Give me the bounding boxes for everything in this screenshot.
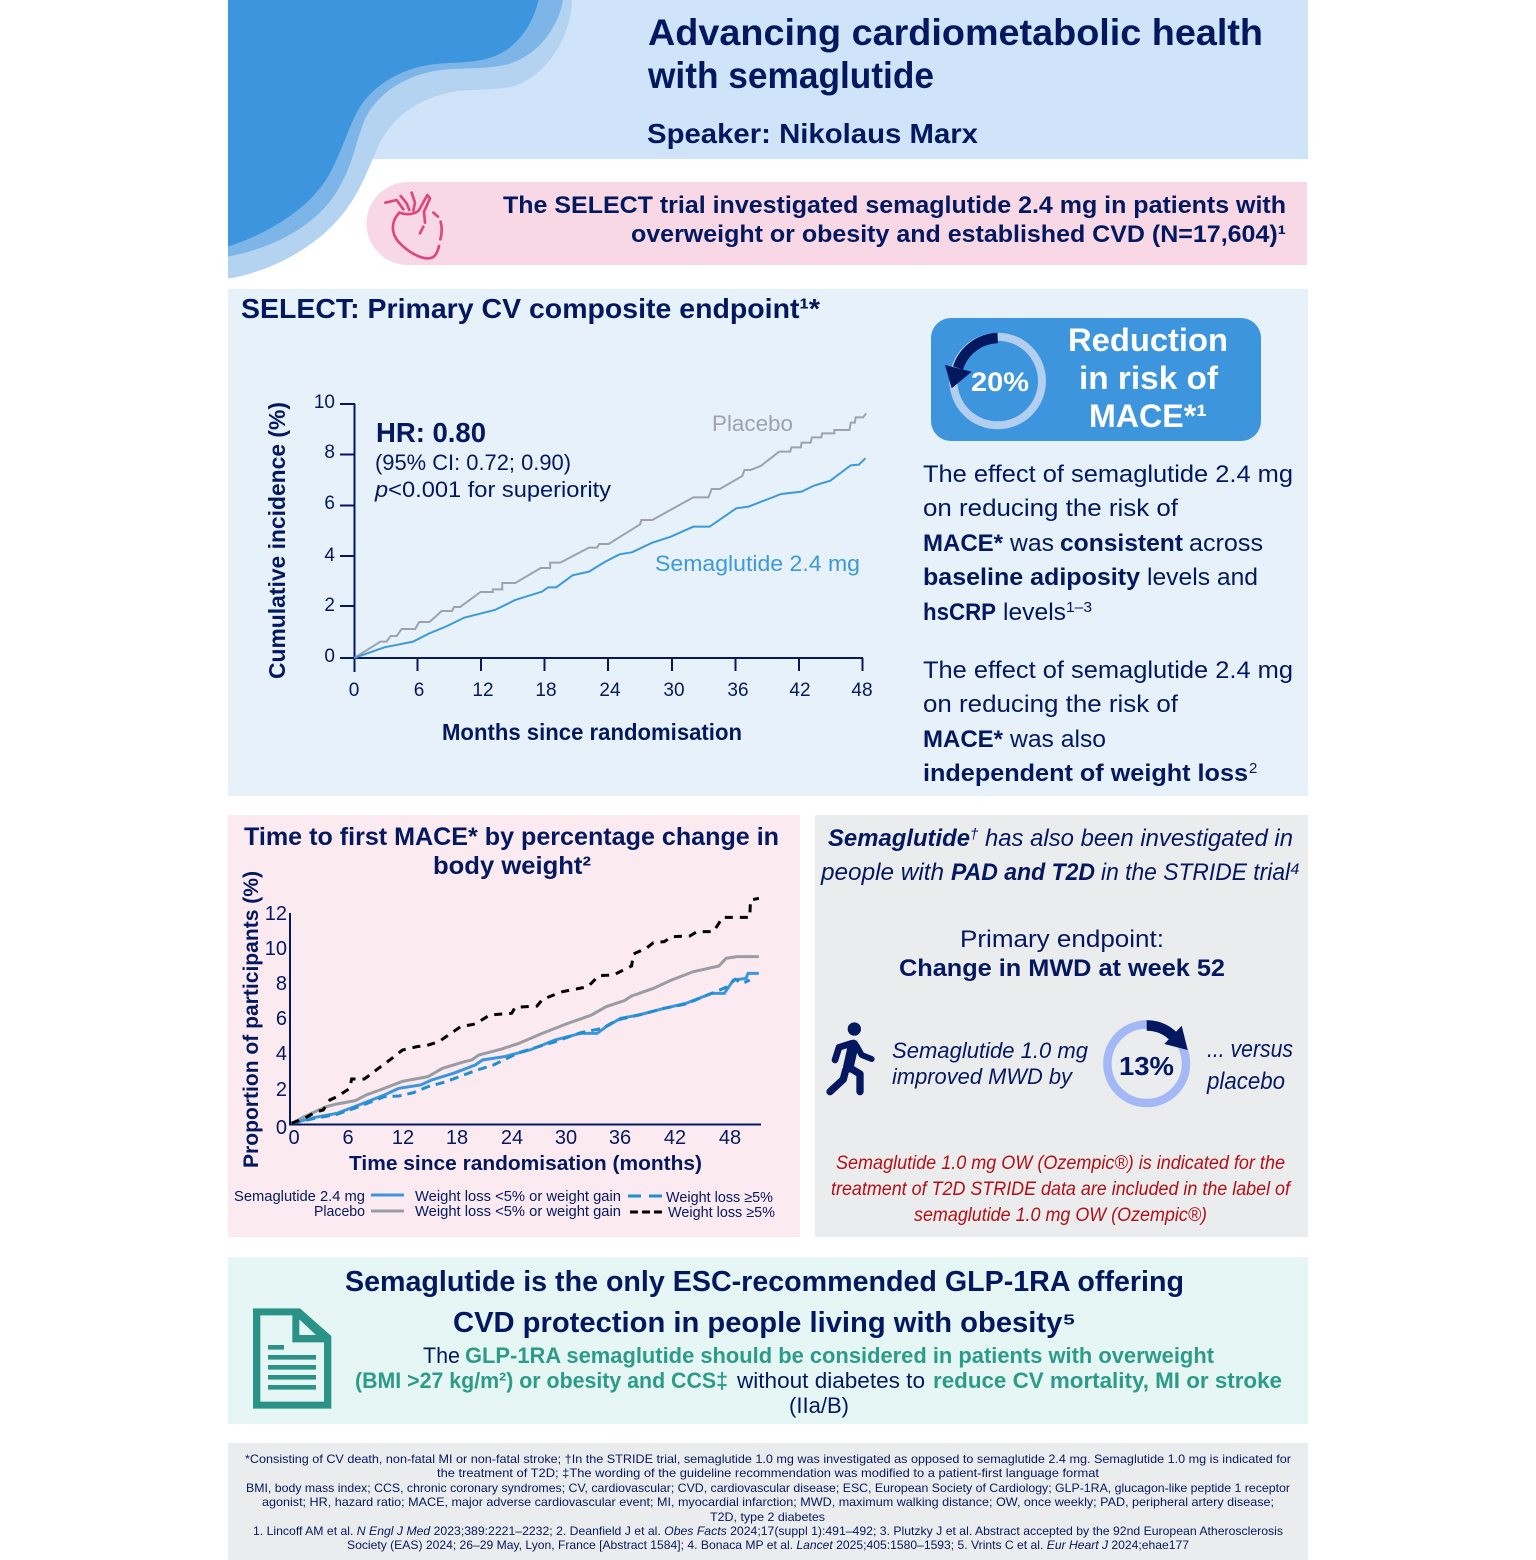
label: placebo: Placebo [712, 411, 793, 436]
recommendation text: GLP-1RA semaglutide should be considered in patients with overweight [465, 1343, 1215, 1368]
line: semaglutide weight loss 5% or more [292, 979, 750, 1123]
y ticks: 0 [324, 646, 335, 667]
y ticks: 10 [314, 392, 335, 413]
heading: CVD protection in people living with obesity⁵ [453, 1307, 1076, 1339]
indication note [831, 1153, 1292, 1226]
legend: Weight loss ≥5% [666, 1190, 773, 1206]
heading [244, 823, 779, 880]
footnote text: T2D, type 2 diabetes [710, 1510, 825, 1524]
title: with semaglutide [647, 55, 934, 96]
x ticks: 24 [501, 1127, 523, 1149]
panel: STRIDE trial [815, 815, 1308, 1237]
legend: Placebo [314, 1204, 365, 1220]
text block: consistent effect: hsCRP [923, 599, 996, 626]
primary endpoint: Primary endpoint: [960, 926, 1164, 953]
recommendation text: reduce CV mortality, MI or stroke [933, 1368, 1282, 1393]
footnote text: *Consisting of CV death, non-fatal MI or non-fatal stroke; †In the STRIDE trial, semaglutide 1.0 mg was investigated as opposed to semaglutide 2.4 mg. Semaglutide 1.0 mg is indicated for [245, 1452, 1291, 1466]
heading: in the STRIDE trial⁴ [1101, 859, 1300, 886]
footnote text: the treatment of T2D; ‡The wording of the guideline recommendation was modified to a patient-first language format [437, 1466, 1100, 1480]
x ticks [288, 1127, 741, 1149]
icon: 20% ring arrow [945, 337, 1042, 425]
line: semaglutide [354, 458, 865, 658]
text: semaglutide improved: Semaglutide 1.0 mg [892, 1038, 1089, 1063]
legend: Weight loss <5% or weight gain [415, 1204, 621, 1220]
recommendation text: The [423, 1343, 460, 1368]
chart: proportion of participants [240, 871, 761, 1175]
y ticks: 4 [324, 545, 335, 566]
y ticks: 10 [265, 938, 287, 960]
x ticks: 12 [392, 1127, 414, 1149]
recommendation text: (BMI >27 kg/m²) or obesity and CCS‡ [355, 1368, 728, 1393]
title [647, 12, 1263, 96]
primary endpoint: Change in MWD at week 52 [899, 955, 1225, 982]
x ticks: 18 [535, 680, 557, 701]
heading: † [970, 826, 979, 843]
text block: consistent effect: The effect of semaglutide 2.4 mg [923, 461, 1293, 488]
x ticks: 42 [664, 1127, 686, 1149]
indication note: Semaglutide 1.0 mg OW (Ozempic®) is indicated for the [836, 1153, 1285, 1174]
y axis title: Proportion of participants (%) [240, 871, 263, 1168]
callout text: Reduction [1068, 322, 1228, 358]
banner text [503, 192, 1286, 248]
text block: consistent effect [923, 461, 1293, 626]
x ticks: 36 [727, 680, 749, 701]
heading: PAD and T2D [951, 859, 1095, 886]
primary endpoint [899, 926, 1225, 982]
heading: has also been investigated in [985, 825, 1293, 852]
text block: consistent effect: levels and [1147, 564, 1258, 591]
panel: ESC recommendation [228, 1257, 1308, 1424]
footnote text [245, 1452, 1291, 1552]
text block: independent of weight loss: The effect of semaglutide 2.4 mg [923, 657, 1293, 684]
callout: 20% reduction [931, 318, 1261, 441]
x ticks: 0 [349, 680, 359, 701]
speaker: Speaker: Nikolaus Marx [647, 118, 978, 149]
text block: independent of weight loss: on reducing the risk of [923, 691, 1178, 718]
y ticks: 2 [324, 595, 335, 616]
indication note: treatment of T2D STRIDE data are included in the label of [831, 1179, 1292, 1200]
chart: cumulative incidence [264, 392, 873, 745]
x ticks [349, 680, 873, 701]
axes [340, 404, 863, 672]
heading: Time to first MACE* by percentage change in [244, 823, 779, 851]
header banner [228, 0, 1308, 159]
text block: independent of weight loss: MACE* [923, 726, 1004, 753]
callout text: in risk of [1079, 360, 1218, 396]
text block: independent of weight loss: independent of weight loss [923, 760, 1248, 787]
hazard ratio callout: HR: 0.80 [376, 417, 486, 448]
title: Advancing cardiometabolic health [648, 12, 1263, 53]
recommendation text [355, 1343, 1282, 1418]
text: semaglutide improved [892, 1038, 1089, 1089]
x ticks: 18 [446, 1127, 468, 1149]
y ticks: 8 [276, 973, 287, 995]
y ticks: 12 [265, 903, 287, 925]
label: semaglutide: Semaglutide 2.4 mg [655, 551, 860, 576]
text block: independent of weight loss [923, 657, 1293, 787]
y ticks: 4 [276, 1043, 287, 1065]
x ticks: 6 [342, 1127, 354, 1149]
x axis title: Time since randomisation (months) [349, 1153, 702, 1175]
x axis title: Months since randomisation [442, 719, 742, 745]
hazard ratio callout: p<0.001 for superiority [374, 477, 611, 502]
heading: body weight² [433, 852, 591, 880]
indication note: semaglutide 1.0 mg OW (Ozempic®) [914, 1205, 1207, 1226]
legend: Semaglutide 2.4 mg [234, 1189, 365, 1205]
hazard ratio callout [374, 417, 611, 502]
footnote text: 1. Lincoff AM et al. N Engl J Med 2023;389:2221–2232; 2. Deanfield J et al. Obes Facts 2024;17(suppl 1):491–492; 3. Plutzky J et al. Abstract accepted by the 92nd European Atherosclerosis [253, 1524, 1283, 1538]
text: semaglutide improved: improved MWD by [892, 1064, 1074, 1089]
text block: consistent effect: 1–3 [1066, 599, 1092, 616]
heading: Semaglutide is the only ESC-recommended GLP-1RA offering [345, 1266, 1184, 1298]
y ticks: 0 [276, 1117, 287, 1139]
icon: document [253, 1308, 331, 1409]
x ticks: 12 [472, 680, 494, 701]
x ticks: 36 [609, 1127, 631, 1149]
x ticks: 6 [414, 680, 424, 701]
panel: time to first MACE [228, 815, 800, 1237]
heading: people with [820, 859, 944, 886]
legend: Weight loss ≥5% [668, 1205, 775, 1221]
text: versus placebo: ... versus [1207, 1036, 1293, 1063]
x ticks: 24 [599, 680, 621, 701]
footnote text: agonist; HR, hazard ratio; MACE, major adverse cardiovascular event; MI, myocardial infarction; MWD, maximum walking distance; OW, once weekly; PAD, peripheral artery disease; [262, 1495, 1274, 1509]
footnote text: Society (EAS) 2024; 26–29 May, Lyon, France [Abstract 1584]; 4. Bonaca MP et al. Lancet 2025;405:1580–1593; 5. Vrints C et al. Eur Heart J 2024;ehae177 [347, 1538, 1189, 1552]
x ticks: 0 [288, 1127, 300, 1149]
text block: consistent effect: consistent [1060, 530, 1183, 557]
text block: consistent effect: across [1189, 530, 1263, 557]
text block: consistent effect: levels [1003, 599, 1066, 626]
banner text: The SELECT trial investigated semaglutide 2.4 mg in patients with [503, 192, 1286, 219]
y axis title: Cumulative incidence (%) [264, 402, 290, 679]
text: versus placebo [1206, 1036, 1293, 1095]
y ticks [314, 392, 335, 667]
callout text: MACE*¹ [1089, 398, 1207, 434]
icon: heart [385, 193, 442, 258]
callout text [1068, 322, 1228, 434]
pink trial banner [366, 182, 1307, 265]
hazard ratio callout: (95% CI: 0.72; 0.90) [375, 450, 571, 475]
text block: consistent effect: baseline adiposity [923, 564, 1141, 591]
x ticks: 48 [719, 1127, 741, 1149]
line: placebo weight loss under 5% [292, 957, 759, 1123]
text block: consistent effect: was [1009, 530, 1054, 557]
text: versus placebo: placebo [1206, 1068, 1285, 1095]
line: semaglutide weight loss under 5% [292, 973, 759, 1123]
heading [820, 825, 1300, 886]
y ticks [265, 903, 287, 1139]
axes [290, 913, 761, 1124]
line: placebo [354, 413, 866, 658]
x ticks: 30 [663, 680, 685, 701]
y ticks: 6 [324, 493, 335, 514]
icon: 13% ring arrow [1107, 1024, 1188, 1103]
x ticks: 48 [851, 680, 873, 701]
recommendation text: (IIa/B) [789, 1393, 849, 1418]
footnote text: BMI, body mass index; CCS, chronic coronary syndromes; CV, cardiovascular; CVD, cardiovascular disease; ESC, European Society of Cardiology; GLP-1RA, glucagon-like peptide 1 receptor [246, 1481, 1290, 1495]
text block: independent of weight loss: was also [1009, 726, 1106, 753]
x ticks: 30 [555, 1127, 577, 1149]
footnotes [228, 1443, 1308, 1560]
recommendation text: without diabetes to [736, 1368, 925, 1393]
icon: 13% ring arrow: 13% [1119, 1051, 1174, 1081]
icon: 20% ring arrow: 20% [971, 367, 1029, 397]
y ticks: 2 [276, 1079, 287, 1101]
text block: independent of weight loss: 2 [1249, 760, 1257, 777]
text block: consistent effect: on reducing the risk of [923, 495, 1178, 522]
text block: consistent effect: MACE* [923, 530, 1004, 557]
heading: Semaglutide [828, 825, 970, 852]
heading: SELECT: Primary CV composite endpoint¹* [241, 293, 820, 324]
x ticks: 42 [789, 680, 811, 701]
y ticks: 6 [276, 1008, 287, 1030]
banner text: overweight or obesity and established CVD (N=17,604)¹ [631, 221, 1286, 248]
line: placebo weight loss 5% or more [292, 898, 759, 1123]
decorative-layer wave: header corner [228, 0, 572, 279]
y ticks: 8 [324, 442, 335, 463]
icon: walking person [830, 1022, 872, 1092]
legend [234, 1189, 775, 1221]
legend: Weight loss <5% or weight gain [415, 1189, 621, 1205]
heading [345, 1266, 1184, 1339]
panel: SELECT primary endpoint [228, 289, 1308, 796]
